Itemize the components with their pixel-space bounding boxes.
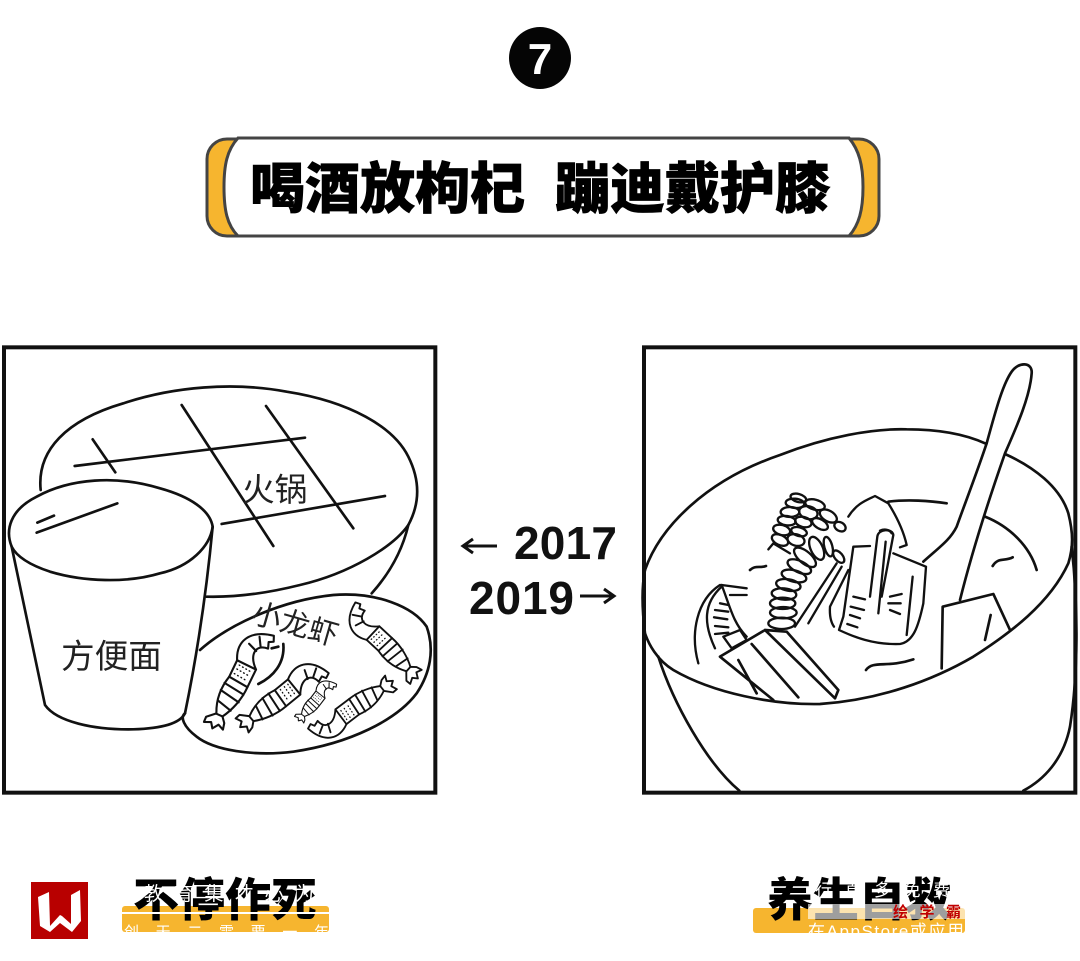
overlay text top: 行 直 多 免 费	[815, 881, 950, 900]
years and arrows: 2017	[514, 517, 617, 569]
panel: left illustration, junk food	[4, 347, 435, 793]
title text: 蹦迪戴护膝	[555, 158, 830, 220]
number badge: 7	[528, 35, 552, 84]
icon: corn pieces	[768, 492, 847, 629]
icon: spoon	[923, 364, 1032, 668]
overlay text bottom: 在AppStore或应用	[808, 922, 964, 941]
icon: crayfish plate: 小龙虾	[248, 597, 342, 653]
overlay text top: 教 育 集 才 必 为	[144, 883, 314, 905]
caption right	[753, 874, 965, 941]
icon: herbs and meat chunks	[695, 496, 926, 700]
logo	[31, 882, 88, 939]
overlay text bottom: 创 天 二 需 要 一 年	[124, 924, 329, 941]
caption right: 养生自救	[767, 874, 951, 926]
icon: soup bowl	[642, 429, 1076, 791]
number badge	[509, 27, 571, 89]
icon: instant noodle cup: 方便面	[61, 638, 162, 676]
years and arrows	[463, 517, 617, 624]
caption left	[122, 874, 329, 941]
icon: instant noodle cup	[9, 480, 213, 729]
icon: crayfish plate	[183, 595, 431, 753]
arrow right	[580, 589, 614, 603]
caption left: 不停作死	[133, 874, 317, 926]
panel frame	[4, 347, 435, 793]
title text: 喝酒放枸杞	[250, 158, 525, 220]
title banner	[207, 138, 879, 236]
icon: hot pot	[40, 387, 417, 597]
arrow left	[463, 539, 497, 553]
years and arrows: 2019	[469, 572, 574, 624]
panel: right illustration, health soup	[642, 347, 1076, 793]
panel frame	[644, 347, 1075, 793]
title text	[250, 158, 830, 220]
red label: 绘 学 霸	[893, 903, 961, 921]
icon: hot pot: 火锅	[242, 471, 307, 508]
